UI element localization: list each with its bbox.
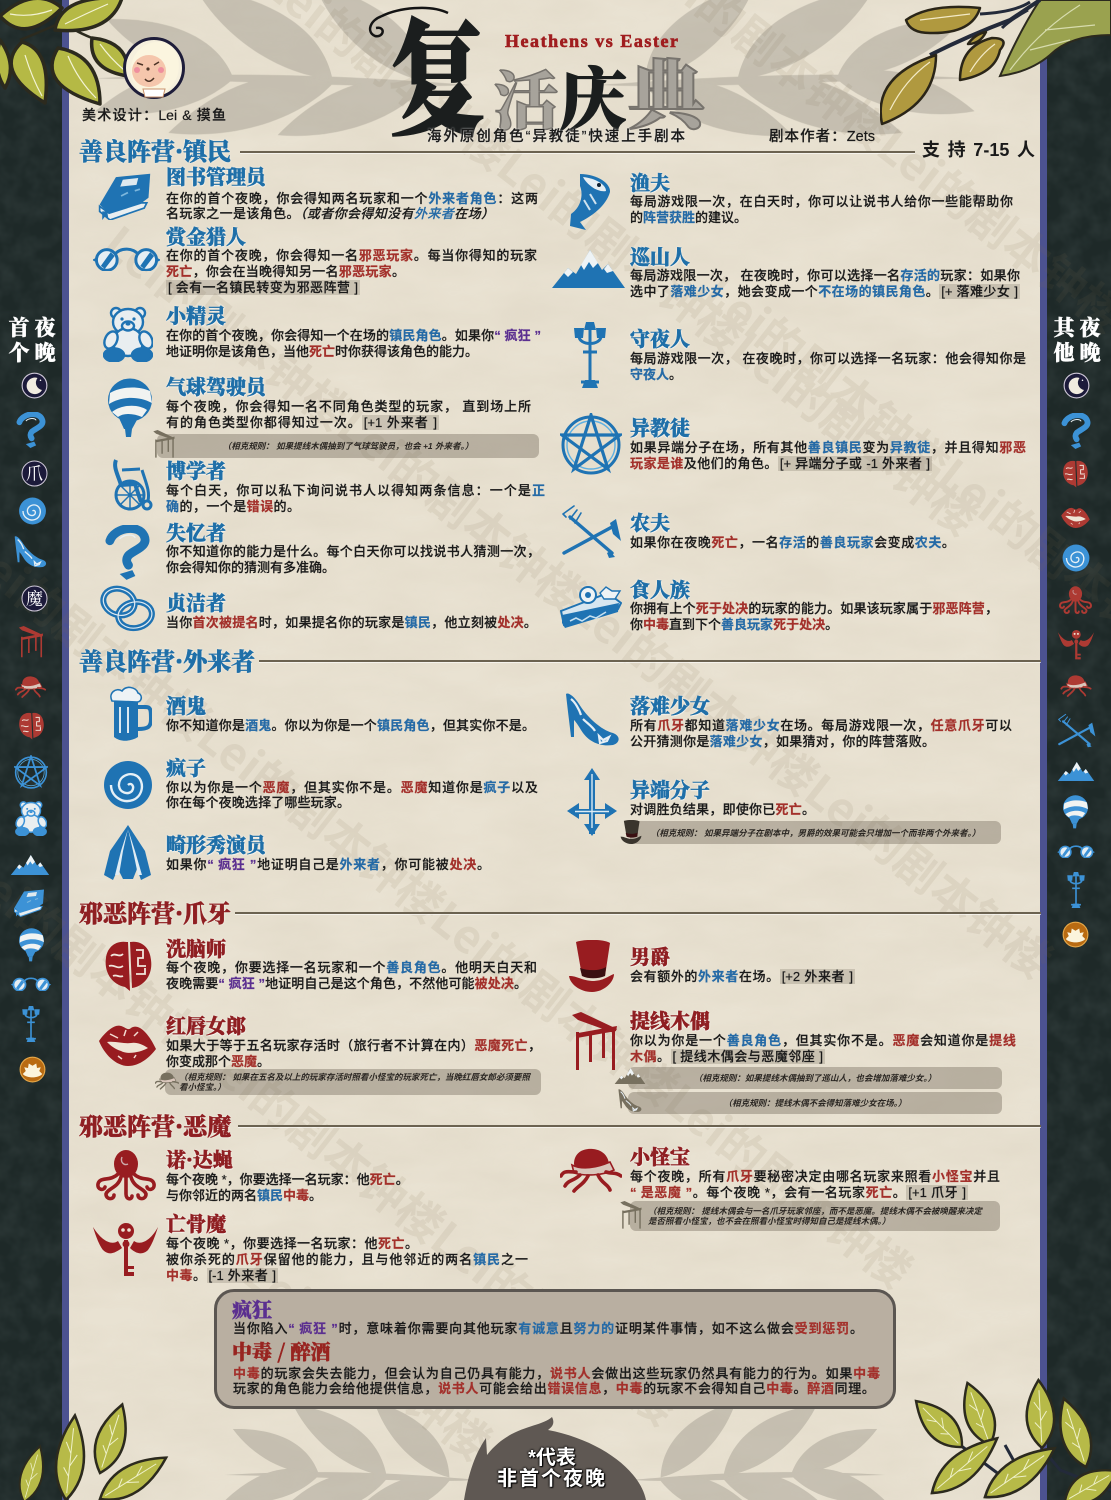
section heading: townsfolk: 善良阵营·镇民 bbox=[79, 132, 231, 167]
role: amnesiac: 你会得知你的猜测有多准确。 bbox=[166, 560, 335, 575]
icon: mini marionette bbox=[153, 430, 175, 458]
legend text: 非首个夜晚 bbox=[497, 1468, 607, 1490]
jinx note: scarlet woman and lil monsta: （相克规则： 如果在五名及以上的玩家存活时照看小怪宝的玩家死亡，当晚红唇女郎必须要照看小怪宝。） bbox=[179, 1072, 530, 1092]
jinx note: marionette and mountaineer: （相克规则：如果提线木偶抽到了巡山人，也会增加落难少女。） bbox=[694, 1073, 936, 1083]
role: boneless demon: 亡骨魔 bbox=[166, 1208, 226, 1237]
icon: crossed tools bbox=[562, 505, 621, 558]
role: mountaineer: 选中了落难少女，她会变成一个不在场的镇民角色。[+ 落难少女 ] bbox=[630, 284, 1018, 299]
title: 复活庆典 bbox=[368, 0, 717, 150]
role: virgin: 贞洁者 bbox=[166, 587, 226, 616]
role: heretic cultist: 玩家是谁及他们的角色。[+ 异端分子或 -1 外来者 ] bbox=[630, 456, 930, 471]
side label: other nights: 晚 bbox=[1080, 337, 1100, 367]
role: lunatic bbox=[104, 752, 538, 810]
role: baron bbox=[552, 940, 1032, 992]
jinx note: marionette and damsel: （相克规则：提线木偶不会得知落难少女在场。） bbox=[724, 1098, 906, 1108]
role: balloonist: 有的角色类型你都得知过一次。[+1 外来者 ] bbox=[166, 415, 437, 430]
jinx note: balloonist and marionette: （相克规则： 如果提线木偶抽到了气球驾驶员，也会 +1 外来者。） bbox=[223, 441, 473, 451]
role: heretic cultist: 如果异端分子在场，所有其他善良镇民变为异教徒，并且得知邪恶 bbox=[630, 440, 1026, 455]
role: fisherman: 的阵营获胜的建议。 bbox=[630, 210, 747, 225]
section heading: outsiders: 善良阵营·外来者 bbox=[79, 642, 255, 677]
icon: mini heel bbox=[618, 1089, 642, 1114]
icon: minion marker: 爪 bbox=[26, 460, 43, 484]
icon: bounty hunter bbox=[11, 976, 51, 991]
role: mutant: 畸形秀演员 bbox=[166, 829, 266, 858]
role: lil monsta: 每个夜晚，所有爪牙要秘密决定由哪名玩家来照看小怪宝并且 bbox=[630, 1169, 1000, 1184]
title: 复活庆典: 典 bbox=[628, 35, 717, 144]
icon: mountaineer bbox=[1053, 762, 1099, 781]
role: boneless demon bbox=[93, 1213, 548, 1283]
role: librarian: 名玩家之一是该角色。（或者你会得知没有外来者在场） bbox=[166, 206, 494, 221]
icon: moon bbox=[21, 372, 48, 399]
jinx note: lil monsta and marionette: （相克规则： 提线木偶会与一名爪牙玩家邻座，而不是恶魔。提线木偶不会被唤醒来决定是否照看小怪宝，也不会在照看小怪宝时得知自己是提线木偶。） bbox=[648, 1206, 982, 1226]
side label: other nights: 他 bbox=[1054, 337, 1074, 367]
role: fisherman bbox=[570, 167, 1013, 230]
night order: first night icons bbox=[10, 370, 60, 1086]
text: poison and drunk bbox=[233, 1366, 881, 1398]
role: no dashii: 诺·达蝇 bbox=[166, 1144, 233, 1173]
role: bounty hunter: 在你的首个夜晚，你会得知一名邪恶玩家。每当你得知的玩家 bbox=[166, 248, 537, 263]
text: poison and drunk: 中毒的玩家会失去能力，但会认为自己仍具有能力，说书人会做出这些玩家仍然具有能力的行为。如果中毒 bbox=[233, 1366, 880, 1381]
role: boneless demon: 被你杀死的爪牙保留他的能力，且与他邻近的两名镇民之一 bbox=[166, 1252, 528, 1267]
role: scarlet woman: 如果大于等于五名玩家存活时（旅行者不计算在内）恶魔死亡， bbox=[166, 1038, 541, 1053]
role: fisherman: 渔夫 bbox=[630, 167, 670, 196]
role: town watchman: 每局游戏限一次， 在夜晚时，你可以选择一名玩家：他会得知你是 bbox=[630, 351, 1026, 366]
side label: other nights: 其 bbox=[1054, 312, 1074, 342]
icon: minion marker bbox=[21, 460, 48, 487]
role: pixie: 在你的首个夜晚，你会得知一个在场的镇民角色。如果你“ 疯狂 ” bbox=[166, 328, 541, 343]
icon: mountaineer bbox=[6, 855, 54, 875]
icon: damsel bbox=[13, 536, 48, 570]
icon: demon marker: 魔 bbox=[26, 584, 43, 610]
background: dark side columns and parchment: Lei的剧本钟楼 bbox=[231, 1239, 506, 1474]
role: lil monsta: 小怪宝 bbox=[630, 1141, 690, 1170]
role: marionette: 提线木偶 bbox=[630, 1005, 710, 1034]
role: marionette: 木偶。[ 提线木偶会与恶魔邻座 ] bbox=[630, 1049, 823, 1064]
role: town watchman: 守夜人 bbox=[630, 323, 690, 352]
icon: beer mug bbox=[110, 686, 152, 741]
icon: moon bbox=[1063, 372, 1090, 399]
role: pixie bbox=[103, 300, 541, 362]
role: savant: 博学者 bbox=[166, 455, 226, 484]
role: amnesiac: 你不知道你的能力是什么。每个白天你可以找说书人猜测一次， bbox=[166, 544, 540, 559]
icon: lunatic bbox=[1062, 544, 1090, 572]
role: town watchman bbox=[574, 322, 1026, 388]
icon: mini top hat bbox=[620, 820, 642, 844]
role: boneless demon: 每个夜晚 *，你要选择一名玩家：他死亡。 bbox=[166, 1236, 418, 1251]
role: lunatic: 你在每个夜晚选择了哪些玩家。 bbox=[166, 795, 350, 810]
icon: rings bbox=[100, 586, 155, 632]
role: amnesiac: 失忆者 bbox=[166, 517, 226, 546]
role: bounty hunter: [ 会有一名镇民转变为邪恶阵营 ] bbox=[168, 280, 358, 295]
role: balloonist bbox=[108, 371, 539, 458]
icon: lil monsta bbox=[1059, 675, 1093, 697]
icon: brain bbox=[105, 940, 152, 992]
jinx note: marionette and damsel bbox=[628, 1092, 1002, 1114]
corner leaves: top left bbox=[0, 0, 126, 106]
night order: other night icons bbox=[1052, 370, 1102, 952]
role: lunatic: 疯子 bbox=[166, 752, 206, 781]
icon: hat octopus bbox=[560, 1148, 622, 1193]
role: heretic bbox=[552, 768, 1032, 846]
bottom note: asterisk legend bbox=[464, 1417, 646, 1500]
side label: other nights: 夜 bbox=[1080, 312, 1100, 342]
role: mutant bbox=[104, 825, 490, 880]
icon: balloon bbox=[108, 378, 152, 437]
role: heretic: 异端分子 bbox=[630, 774, 710, 803]
icon: town watchman bbox=[21, 1006, 41, 1042]
icon: cerenovus bbox=[1062, 460, 1089, 488]
icon: balloonist bbox=[18, 928, 45, 962]
role: cerenovus bbox=[93, 938, 548, 992]
role: cannibal: 你中毒直到下个善良玩家死于处决。 bbox=[630, 617, 838, 632]
role: virgin: 当你首次被提名时，如果提名你的玩家是镇民，他立刻被处决。 bbox=[166, 615, 537, 630]
icon: octopus bbox=[96, 1150, 156, 1202]
role: heretic: 对调胜负结果，即使你已死亡。 bbox=[630, 802, 815, 817]
icon: teddy bear bbox=[103, 306, 153, 362]
role: no dashii: 与你邻近的两名镇民中毒。 bbox=[166, 1188, 322, 1203]
role: heretic cultist: 异教徒 bbox=[630, 412, 690, 441]
role: lunatic: 你以为你是一个恶魔，但其实你不是。恶魔知道你是疯子以及 bbox=[166, 780, 538, 795]
role: cerenovus: 每个夜晚，你要选择一名玩家和一个善良角色。他明天白天和 bbox=[166, 960, 537, 975]
side label: first night bbox=[6, 315, 58, 365]
icon: lips bbox=[98, 1022, 157, 1066]
role: savant: 确的，一个是错误的。 bbox=[166, 499, 300, 514]
icon: top hat bbox=[568, 940, 615, 992]
icon: mini marionette bbox=[620, 1201, 642, 1231]
corner leaves: bottom right bbox=[914, 1378, 1111, 1500]
side label: other nights bbox=[1051, 315, 1103, 365]
heading: poison and drunk: 中毒 / 醉酒 bbox=[232, 1336, 330, 1365]
icon: librarian bbox=[13, 888, 45, 917]
corner leaves: bottom left bbox=[18, 1402, 168, 1500]
text: poison and drunk: 玩家的角色能力会给他提供信息，说书人可能会给出错误信息，中毒的玩家不会得知自己中毒。醉酒同理。 bbox=[233, 1381, 875, 1396]
role: drunk: 酒鬼 bbox=[166, 690, 206, 719]
role: marionette bbox=[552, 1010, 1032, 1116]
icon: marionette bbox=[16, 626, 46, 660]
role: scarlet woman: 你变成那个恶魔。 bbox=[166, 1054, 270, 1069]
icon: amnesiac bbox=[16, 412, 46, 448]
silhouette bbox=[464, 1417, 646, 1500]
legend text: *代表 bbox=[528, 1447, 576, 1469]
role: no dashii bbox=[93, 1149, 548, 1203]
role: farmer: 农夫 bbox=[630, 507, 670, 536]
avatar: designer portrait bbox=[123, 37, 185, 99]
role: damsel: 公开猜测你是落难少女，如果猜对，你的阵营落败。 bbox=[630, 734, 935, 749]
jinx note: heretic and baron bbox=[630, 821, 1001, 844]
role: mutant: 如果你“ 疯狂 ”地证明自己是外来者，你可能被处决。 bbox=[166, 857, 490, 872]
role: cerenovus: 夜晚需要“ 疯狂 ”地证明自己是这个角色，不然他可能被处决。 bbox=[166, 976, 527, 991]
role: scarlet woman bbox=[93, 1015, 548, 1095]
jinx note: marionette and mountaineer bbox=[628, 1067, 1002, 1089]
role: pixie: 小精灵 bbox=[166, 300, 226, 329]
role: drunk bbox=[110, 686, 535, 741]
icon: dawn bbox=[1062, 921, 1089, 948]
role: mountaineer: 巡山人 bbox=[630, 241, 690, 270]
jinx note: balloonist and marionette bbox=[157, 434, 539, 458]
icon: question mark bbox=[106, 525, 150, 580]
icon: book bbox=[98, 174, 150, 220]
icon: bounty hunter bbox=[1057, 844, 1095, 858]
icon: farmer bbox=[1058, 713, 1096, 748]
role: baron: 男爵 bbox=[630, 941, 670, 970]
panel: glossary bbox=[214, 1289, 896, 1409]
icon: high heel bbox=[565, 693, 620, 750]
role: bounty hunter: 死亡，你会在当晚得知另一名邪恶玩家。 bbox=[166, 264, 405, 279]
subtitle: 海外原创角色“异教徒”快速上手剧本 bbox=[427, 129, 685, 145]
icon: boneless demon bbox=[1058, 629, 1094, 662]
role: mountaineer bbox=[552, 241, 1020, 299]
role: lil monsta bbox=[552, 1146, 1032, 1232]
icon: circus tent bbox=[103, 825, 152, 880]
credit: script author: 剧本作者：Zets bbox=[769, 129, 875, 145]
icon: amnesiac bbox=[1061, 413, 1091, 449]
icon: winged skull key bbox=[93, 1222, 158, 1280]
side label: first night: 首 bbox=[8, 312, 30, 342]
role: damsel: 落难少女 bbox=[630, 690, 710, 719]
icon: mini mountain bbox=[613, 1068, 647, 1084]
role: damsel bbox=[552, 693, 1032, 750]
icon: spiral bbox=[104, 761, 152, 809]
section heading: minions: 邪恶阵营·爪牙 bbox=[79, 894, 231, 929]
section heading: demons: 邪恶阵营·恶魔 bbox=[79, 1107, 231, 1142]
legend text bbox=[464, 1448, 646, 1490]
icon: pixie bbox=[15, 800, 47, 836]
role: librarian: 在你的首个夜晚，你会得知两名玩家和一个外来者角色：这两 bbox=[166, 191, 538, 206]
role: mountaineer: 每局游戏限一次， 在夜晚时，你可以选择一名存活的玩家：如果你 bbox=[630, 268, 1020, 283]
corner leaves: top right bbox=[880, 0, 1111, 126]
role: amnesiac bbox=[106, 517, 540, 580]
title: 复活庆典: Heathens vs Easter bbox=[505, 31, 678, 51]
background: dark side columns and parchment: Lei的剧本钟楼Lei的剧本钟楼Lei的剧本钟楼Lei的剧本钟楼 bbox=[91, 209, 1067, 991]
role: bounty hunter bbox=[93, 221, 537, 295]
role: fisherman: 每局游戏限一次，在白天时，你可以让说书人给你一些能帮助你 bbox=[630, 194, 1013, 209]
role: cannibal bbox=[560, 574, 998, 632]
icon: pie bbox=[560, 586, 622, 628]
role: balloonist: 每个夜晚，你会得知一名不同角色类型的玩家， 直到场上所 bbox=[166, 399, 531, 414]
role: heretic cultist bbox=[560, 412, 1026, 474]
role: pixie: 地证明你是该角色，当他死亡时你获得该角色的能力。 bbox=[166, 344, 478, 359]
heading: madness: 疯狂 bbox=[232, 1294, 272, 1323]
jinx note: heretic and baron: （相克规则： 如果异端分子在剧本中，男爵的效果可能会只增加一个而非两个外来者。） bbox=[651, 828, 980, 838]
title: 复活庆典: 庆 bbox=[559, 47, 627, 144]
icon: mountain bbox=[552, 250, 625, 288]
icon: town watchman bbox=[1066, 872, 1086, 908]
role: lil monsta: “ 是恶魔 ”。每个夜晚 *，会有一名玩家死亡。[+1 爪牙 ] bbox=[630, 1185, 966, 1200]
icon: mini monster bbox=[155, 1071, 179, 1091]
icon: dawn bbox=[19, 1056, 46, 1083]
role: marionette: 你以为你是一个善良角色，但其实你不是。恶魔会知道你是提线 bbox=[630, 1033, 1016, 1048]
role: cannibal: 你拥有上个死于处决的玩家的能力。如果该玩家属于邪恶阵营， bbox=[630, 601, 998, 616]
role: farmer: 如果你在夜晚死亡，一名存活的善良玩家会变成农夫。 bbox=[630, 535, 955, 550]
role: cerenovus: 洗脑师 bbox=[166, 933, 226, 962]
role: boneless demon: 中毒。[-1 外来者 ] bbox=[166, 1268, 276, 1283]
role: baron: 会有额外的外来者在场。[+2 外来者 ] bbox=[630, 969, 853, 984]
icon: cerenovus bbox=[18, 712, 45, 740]
icon: cult leader bbox=[14, 755, 48, 789]
icon: wheelchair bbox=[113, 459, 152, 510]
player count: 支持7-15人 bbox=[922, 140, 1035, 160]
role: balloonist: 气球驾驶员 bbox=[166, 371, 266, 400]
role: cannibal: 食人族 bbox=[630, 574, 690, 603]
title: 复活庆典: 活 bbox=[494, 51, 558, 143]
icon: marionette bbox=[572, 1012, 617, 1075]
side label: first night: 个 bbox=[8, 337, 30, 367]
icon: no dashii bbox=[1059, 586, 1092, 615]
icon: balloonist bbox=[1062, 795, 1089, 829]
icon: scarlet woman bbox=[1058, 506, 1093, 528]
icon: inverted cross bbox=[567, 768, 617, 836]
role: librarian bbox=[98, 161, 538, 221]
side label: first night: 夜 bbox=[34, 312, 56, 342]
role: no dashii: 每个夜晚 *，你要选择一名玩家：他死亡。 bbox=[166, 1172, 409, 1187]
icon: lunatic bbox=[18, 497, 47, 525]
jinx note: lil monsta and marionette bbox=[630, 1201, 1000, 1231]
icon: lil monsta bbox=[14, 676, 47, 698]
icon: pentacle bbox=[560, 413, 622, 474]
side label: first night: 晚 bbox=[34, 337, 56, 367]
role: virgin bbox=[100, 586, 537, 632]
role: librarian: 图书管理员 bbox=[166, 161, 266, 190]
role: savant bbox=[113, 455, 545, 514]
icon: demon marker bbox=[21, 585, 48, 612]
role: farmer bbox=[562, 505, 955, 558]
icon: fish bbox=[570, 174, 610, 230]
role: drunk: 你不知道你是酒鬼。你以为你是一个镇民角色，但其实你不是。 bbox=[166, 718, 535, 733]
role: town watchman: 守夜人。 bbox=[630, 367, 682, 382]
role: damsel: 所有爪牙都知道落难少女在场。每局游戏限一次，任意爪牙可以 bbox=[630, 718, 1012, 733]
role: bounty hunter: 赏金猎人 bbox=[166, 221, 246, 250]
icon: lamp post bbox=[574, 322, 606, 388]
text: madness: 当你陷入“ 疯狂 ”时，意味着你需要向其他玩家有诚意且努力的证明某件事情，如不这么做会受到惩罚。 bbox=[233, 1321, 863, 1336]
credit: art design: 美术设计：Lei & 摸鱼 bbox=[82, 107, 226, 123]
role: savant: 每个白天，你可以私下询问说书人以得知两条信息：一个是正 bbox=[166, 483, 545, 498]
role: scarlet woman: 红唇女郎 bbox=[166, 1010, 246, 1039]
icon: glasses bbox=[93, 248, 160, 271]
